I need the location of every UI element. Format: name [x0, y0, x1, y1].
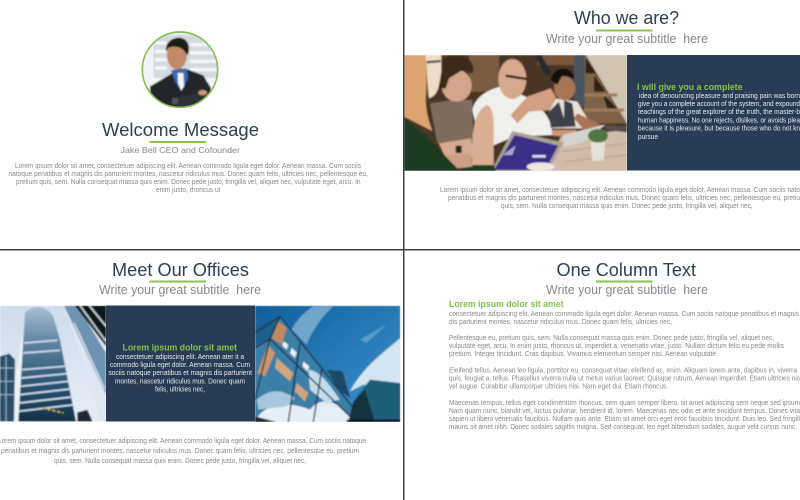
paragraph 1	[449, 309, 799, 326]
portrait photo	[142, 31, 218, 108]
front woman	[472, 105, 494, 171]
panel: one column text	[449, 260, 800, 431]
paragraph 3: vel augue. Curabitur ullamcorper ultricies nisi. Nam eget dui. Etiam rhoncus.	[449, 382, 668, 390]
title: Who we are?: Who we are?	[574, 8, 679, 28]
subtitle: Write your great subtitle here	[99, 282, 261, 297]
title: Welcome Message: Welcome Message	[102, 120, 259, 140]
text panel: navy	[106, 306, 255, 422]
body text: Lorem ipsum dolor sit amet, consectetuer adipiscing elit. Aenean commodo ligula eget dolor. Aenean massa. Cum sociis	[15, 161, 361, 170]
text panel: navy	[627, 55, 800, 170]
body text: pretium quis, sem. Nulla consequat massa quis enim. Donec pede justo, fringilla vel, aliquet nec, vulputate eget, arcu. In	[16, 177, 360, 186]
body text: quis, sem. Nulla consequat massa quis enim. Donec pede justo, fringilla vel, aliquet nec,	[54, 456, 306, 465]
title: One Column Text: One Column Text	[556, 260, 696, 280]
panel paragraph	[108, 352, 252, 394]
tablet	[491, 131, 563, 171]
panel paragraph: commodo ligula eget dolor. Aenean massa. Cum	[110, 360, 250, 369]
subtitle: Write your great subtitle here	[546, 282, 708, 297]
title underline	[596, 280, 652, 282]
body text: penatibus et magnis dis parturient montes, nascetur ridiculus mus. Donec quam felis, ultricies nec, pellentesque eu, pretium	[1, 446, 359, 455]
panel paragraph: sociis natoque penatibus et magnis dis parturient	[108, 368, 252, 377]
title underline	[596, 30, 652, 32]
back man	[472, 87, 552, 145]
body text	[8, 161, 368, 194]
title underline	[150, 280, 206, 282]
right woman	[549, 98, 589, 128]
panel paragraph	[638, 91, 800, 141]
panel: welcome message	[8, 31, 368, 194]
paragraph 2	[449, 333, 784, 358]
team meeting photo	[404, 55, 627, 171]
title: Meet Our Offices: Meet Our Offices	[112, 260, 249, 280]
panel paragraph: pursue	[638, 132, 658, 141]
subtitle: name and role: Jake Bell CEO and Cofounder	[120, 145, 240, 155]
laptop	[562, 124, 606, 147]
panel: meet our offices	[0, 260, 400, 465]
plant	[591, 142, 605, 161]
panel heading: Lorem ipsum dolor sit amet	[122, 342, 237, 352]
body text	[0, 436, 366, 465]
tower photo	[0, 306, 106, 422]
body text: natoque penatibus et magnis dis parturient montes, nascetur ridiculus mus. Donec quam felis, ultricies nec, pellentesque eu,	[8, 169, 368, 178]
curly woman	[430, 100, 473, 145]
title underline	[150, 141, 206, 143]
glass building photo	[255, 306, 400, 422]
panel paragraph: montes, nascetur ridiculus mus. Donec quam	[115, 376, 245, 386]
paragraph 1: dis parturient montes, nascetur ridiculus mus. Donec quam felis, ultricies nec,	[449, 317, 672, 326]
paragraph 3	[449, 366, 800, 390]
panel paragraph: consectetuer adipiscing elit. Aenean ater it a	[116, 352, 244, 361]
green heading: Lorem ipsum dolor sit amet	[449, 299, 564, 309]
panel heading: I will give you a complete	[637, 82, 742, 92]
table	[547, 130, 627, 171]
body text: enim justo, rhoncus ut	[156, 185, 220, 194]
panel: who we are	[404, 8, 800, 210]
panel paragraph: felis, ultricies nec,	[155, 384, 205, 394]
paragraph 4	[449, 398, 800, 431]
body text	[440, 185, 800, 210]
body text: Lorem ipsum dolor sit amet, consectetuer adipiscing elit. Aenean commodo ligula eget dolor. Aenean massa. Cum sociis natoque	[0, 436, 366, 445]
paragraph 2: pretium. Integer tincidunt. Cras dapibus. Vivamus elementum semper nisi. Aenean vulputate	[449, 349, 716, 358]
body text: quis, sem. Nulla consequat massa quis enim. Donec pede justo, fringilla vel, aliquet nec,	[501, 201, 752, 210]
subtitle: Write your great subtitle here	[546, 31, 708, 46]
